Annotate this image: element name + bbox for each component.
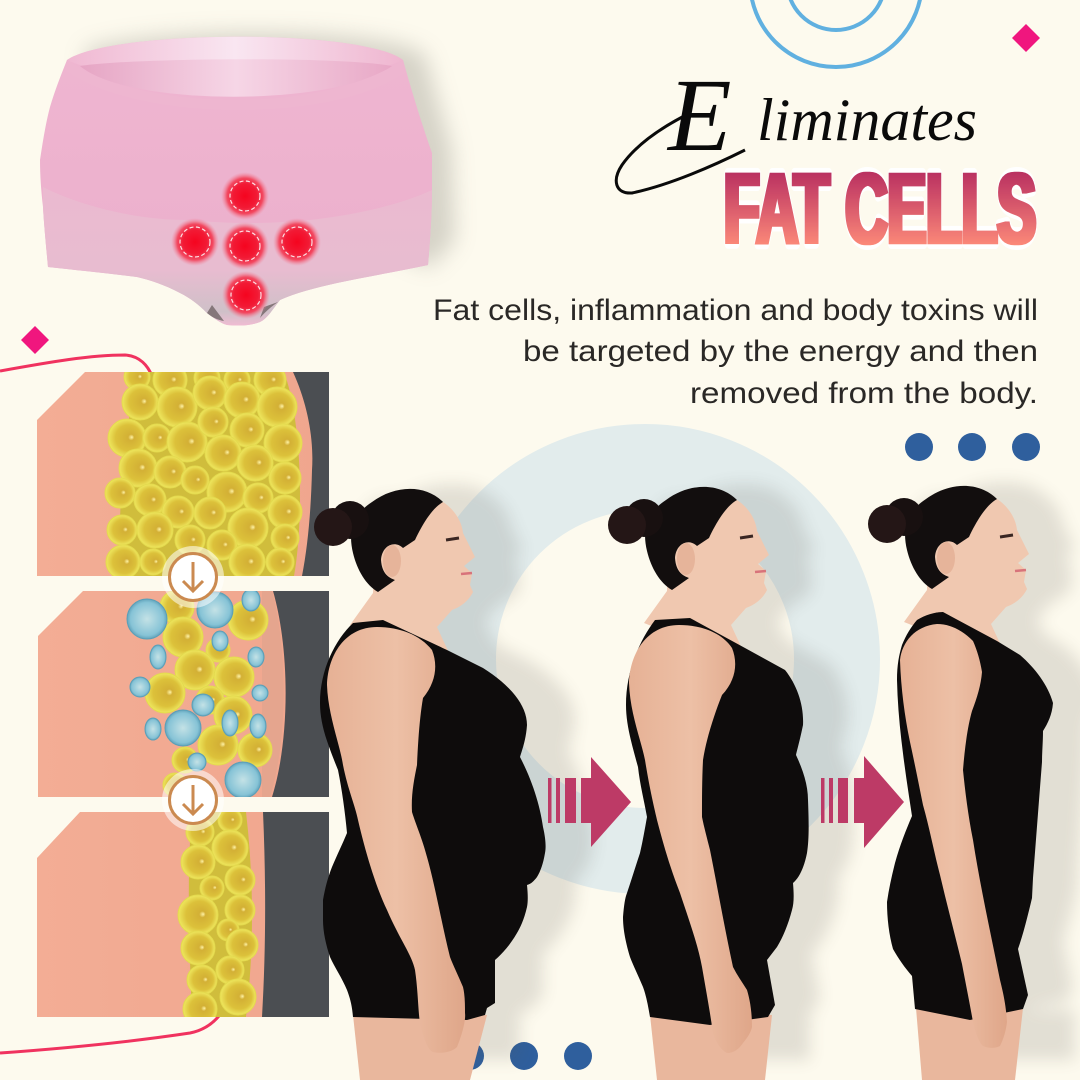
heat point centre <box>221 222 269 270</box>
arrow 1 <box>548 757 631 847</box>
panel: fat cells before <box>37 363 329 582</box>
product: pink briefs with heat points <box>40 33 455 326</box>
figure: woman after <box>868 486 1053 1080</box>
decorative blue circles top <box>750 0 922 67</box>
pink frame line top <box>0 355 152 376</box>
soft shadows behind figures <box>362 482 1080 1060</box>
heat point right <box>273 218 321 266</box>
description text: be targeted by the energy and then <box>523 335 1038 368</box>
description text <box>433 294 1038 410</box>
script heading: Eliminates <box>616 58 977 193</box>
heat point left <box>171 218 219 266</box>
icon: down arrow badge 2 <box>162 769 224 831</box>
script heading: Eliminates: E <box>668 58 732 173</box>
figure: woman middle <box>608 487 809 1080</box>
description text: removed from the body. <box>690 377 1038 410</box>
arrow 2 <box>821 756 904 848</box>
panel: fat cells breaking down <box>38 589 329 798</box>
heat point top <box>221 172 269 220</box>
icon: pink diamond top right <box>1012 24 1040 52</box>
pink frame line bottom <box>0 1012 222 1053</box>
three blue dots <box>905 433 1040 461</box>
script heading: Eliminates: liminates <box>757 87 977 153</box>
icon: down arrow badge 1 <box>162 546 224 608</box>
figure: woman before <box>314 489 546 1080</box>
heat point bottom <box>222 271 270 319</box>
decorative pale blue ring <box>453 467 837 851</box>
description text: Fat cells, inflammation and body toxins will <box>433 294 1038 327</box>
bottom blue dots <box>456 1042 592 1070</box>
icon: pink diamond left <box>21 326 49 354</box>
panel: fat cells reduced <box>37 808 329 1026</box>
